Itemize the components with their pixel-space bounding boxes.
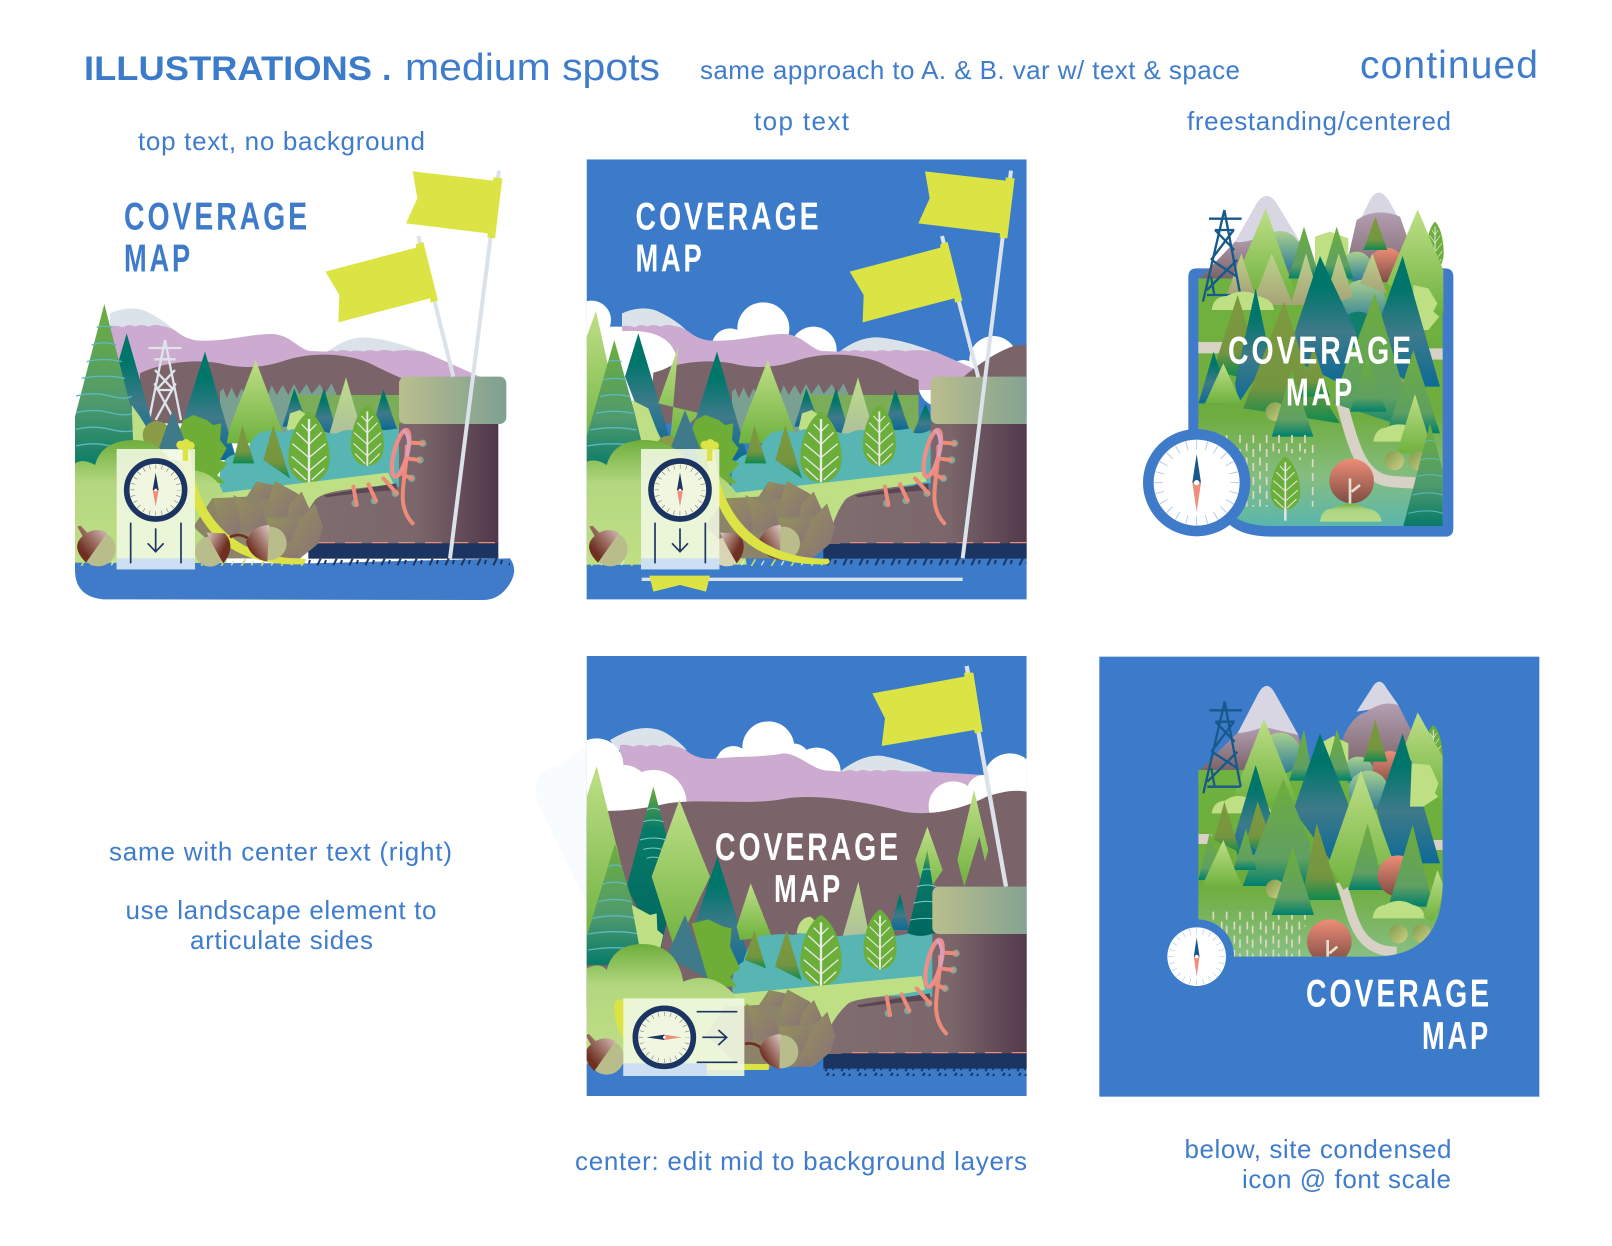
boot cuff and laces: [885, 377, 1038, 523]
teal tree and leaf bush: [632, 905, 740, 987]
title C: [715, 826, 901, 911]
top trees: [1227, 208, 1443, 313]
forest trees: [1198, 733, 1443, 922]
acorn right: [745, 1034, 798, 1069]
boot body: [825, 423, 1030, 559]
note: same with center text: same with center text (right): [109, 836, 452, 866]
heading: illustrations medium spots: .: [382, 50, 391, 88]
brown hill: [587, 791, 1027, 1007]
title freestanding: COVERAGE: [1228, 330, 1414, 372]
caption: below condensed: [1184, 1134, 1452, 1194]
leaf trees: [800, 909, 897, 986]
title D: [1306, 972, 1492, 1058]
flag lower: [325, 242, 438, 322]
road: [1198, 348, 1443, 483]
boot cuff and laces: [887, 887, 1040, 1033]
ground ribbon: [217, 473, 393, 560]
ground ribbon: [733, 976, 925, 1063]
shrubs: [632, 400, 700, 453]
caption: freestanding centered: freestanding/centered: [1187, 106, 1451, 136]
heading: illustrations medium spots: ILLUSTRATIONS: [84, 50, 372, 88]
note: use landscape element: [126, 895, 436, 955]
acorn right: [759, 525, 800, 561]
right teal bush: [912, 430, 931, 484]
panel C: center text: [570, 656, 1040, 1096]
faint cloud ghost outside panel C: [536, 745, 587, 905]
map base: [1198, 770, 1443, 957]
title C: COVERAGE: [715, 826, 901, 869]
trees back: [587, 766, 988, 973]
compass card: [117, 449, 195, 569]
blue ground: [587, 1063, 1027, 1096]
compass card: [641, 449, 719, 569]
strap: [706, 452, 830, 564]
flag lower: [850, 242, 962, 322]
boot sole extension: [823, 543, 843, 559]
leaf tree: [1270, 457, 1300, 510]
caption: top text: top text: [754, 106, 850, 136]
clouds: [572, 301, 1017, 407]
title D: COVERAGE: [1306, 972, 1492, 1016]
dark teal tree: [115, 333, 160, 450]
left trees: [587, 311, 700, 470]
foreground bush: [75, 440, 227, 563]
blue background: [587, 159, 1027, 599]
striped pine left: [587, 843, 642, 965]
title B: COVERAGE: [636, 196, 822, 238]
olive balls: [1385, 451, 1428, 470]
poles: [942, 171, 1011, 558]
flag upper: [918, 171, 1015, 238]
boot cuff and laces: [353, 377, 506, 523]
far mountains and hills: [110, 308, 483, 423]
low bush: [1320, 503, 1382, 522]
right small tree: [914, 404, 934, 434]
striped pine tree: [75, 304, 140, 470]
lime grass marks: [80, 558, 310, 566]
strap: [614, 999, 769, 1070]
bottom ribbon: [649, 576, 710, 592]
dash field: [1227, 435, 1313, 507]
roads and lower map items: [1198, 839, 1443, 964]
caption: below condensed: icon @ font scale: [1242, 1164, 1451, 1194]
note: use landscape element: articulate sides: [190, 925, 373, 955]
title C: MAP: [774, 868, 843, 911]
foreground bush: [587, 440, 747, 565]
acorn middle: [195, 533, 230, 567]
panel A: top text, no background: [75, 171, 514, 600]
pine waves: [640, 808, 940, 920]
panel D: below text: [1099, 657, 1539, 1097]
clouds back: [716, 721, 1026, 790]
blue ground: [75, 558, 514, 600]
ground ribbon: [736, 472, 926, 523]
strap: [182, 452, 305, 564]
far hills: [622, 308, 995, 423]
compass card horizontal: [623, 998, 744, 1076]
grass on sole: [823, 1068, 1027, 1076]
flag upper: [406, 171, 502, 238]
pale top leaf tree: [1426, 222, 1444, 268]
note: use landscape element: use landscape element to: [126, 895, 436, 925]
snow caps: [610, 728, 933, 772]
boot body: [293, 423, 498, 559]
acorn right: [230, 525, 287, 562]
flag poles: [418, 171, 499, 558]
back bushes: [1259, 733, 1407, 811]
flag pole: [967, 666, 1006, 887]
boot sole extension: [823, 1053, 843, 1069]
subheading: same approach: same approach to A. & B. var w/ text & space: [700, 55, 1240, 85]
olive trees: [745, 917, 820, 980]
title freestanding: [1228, 330, 1414, 414]
acorn middle: [719, 532, 744, 566]
panel B: top text on blue: [572, 159, 1038, 599]
strap knob: [701, 439, 719, 461]
leaf tree top right: [1424, 725, 1443, 772]
pine cone: [705, 481, 835, 558]
mountains: [1200, 192, 1412, 278]
navy grass marks: [823, 558, 1027, 566]
bottom bar: [642, 578, 963, 581]
power tower: [1203, 210, 1242, 302]
striped pine: [1403, 423, 1443, 526]
map interior: [1198, 278, 1443, 526]
teal bushes: [732, 933, 933, 997]
panel: freestanding centered map badge: [1148, 192, 1453, 537]
boot body: [827, 933, 1032, 1069]
light shrub: [1212, 796, 1272, 813]
caption: center edit: center: edit mid to background layers: [575, 1146, 1027, 1176]
navy grass marks: [308, 558, 510, 566]
leaf tree trunk: [1282, 508, 1289, 521]
front cloud left: [587, 331, 676, 417]
right hill: [960, 345, 1027, 417]
light trees top: [1233, 712, 1443, 803]
midground forest: [690, 352, 919, 493]
title D: MAP: [1422, 1015, 1491, 1058]
title A: MAP: [124, 238, 193, 280]
blue background: [587, 656, 1027, 1096]
acorn left: [77, 526, 116, 566]
acorn left: [585, 1034, 624, 1075]
purple range: [620, 745, 983, 813]
title B: [636, 196, 822, 280]
flag: [872, 673, 983, 746]
forest trees: [1198, 256, 1440, 453]
acorn left: [589, 526, 628, 566]
compass badge: [1148, 434, 1245, 531]
small teal and light shrubs: [132, 405, 188, 450]
caption: top text no background: top text, no background: [138, 126, 425, 156]
foreground bush: [587, 944, 753, 1063]
blue ground: [587, 565, 1027, 599]
red tree: [1329, 459, 1374, 505]
title A: [124, 196, 310, 280]
clouds front: [586, 738, 988, 816]
blue background: [1099, 657, 1539, 1097]
title freestanding: MAP: [1286, 372, 1355, 414]
light shrubs: [1212, 285, 1439, 330]
compass badge: [1167, 919, 1234, 986]
strap knob: [176, 439, 195, 461]
pine cone: [706, 989, 836, 1067]
heading: illustrations medium spots: medium spots: [405, 47, 660, 89]
power tower: [148, 340, 182, 420]
heading: illustrations medium spots: [84, 47, 660, 89]
caption: below condensed: below, site condensed: [1184, 1134, 1452, 1164]
power tower: [1203, 702, 1242, 793]
pine cone: [193, 481, 323, 558]
title A: COVERAGE: [124, 196, 310, 238]
round bushes: [1259, 231, 1404, 348]
blue frame: [1188, 268, 1453, 537]
mountains: [1200, 682, 1412, 770]
heading: continued: continued: [1360, 44, 1538, 87]
lime grass marks: [587, 558, 823, 566]
title B: MAP: [636, 238, 704, 280]
midground forest: [178, 352, 407, 493]
